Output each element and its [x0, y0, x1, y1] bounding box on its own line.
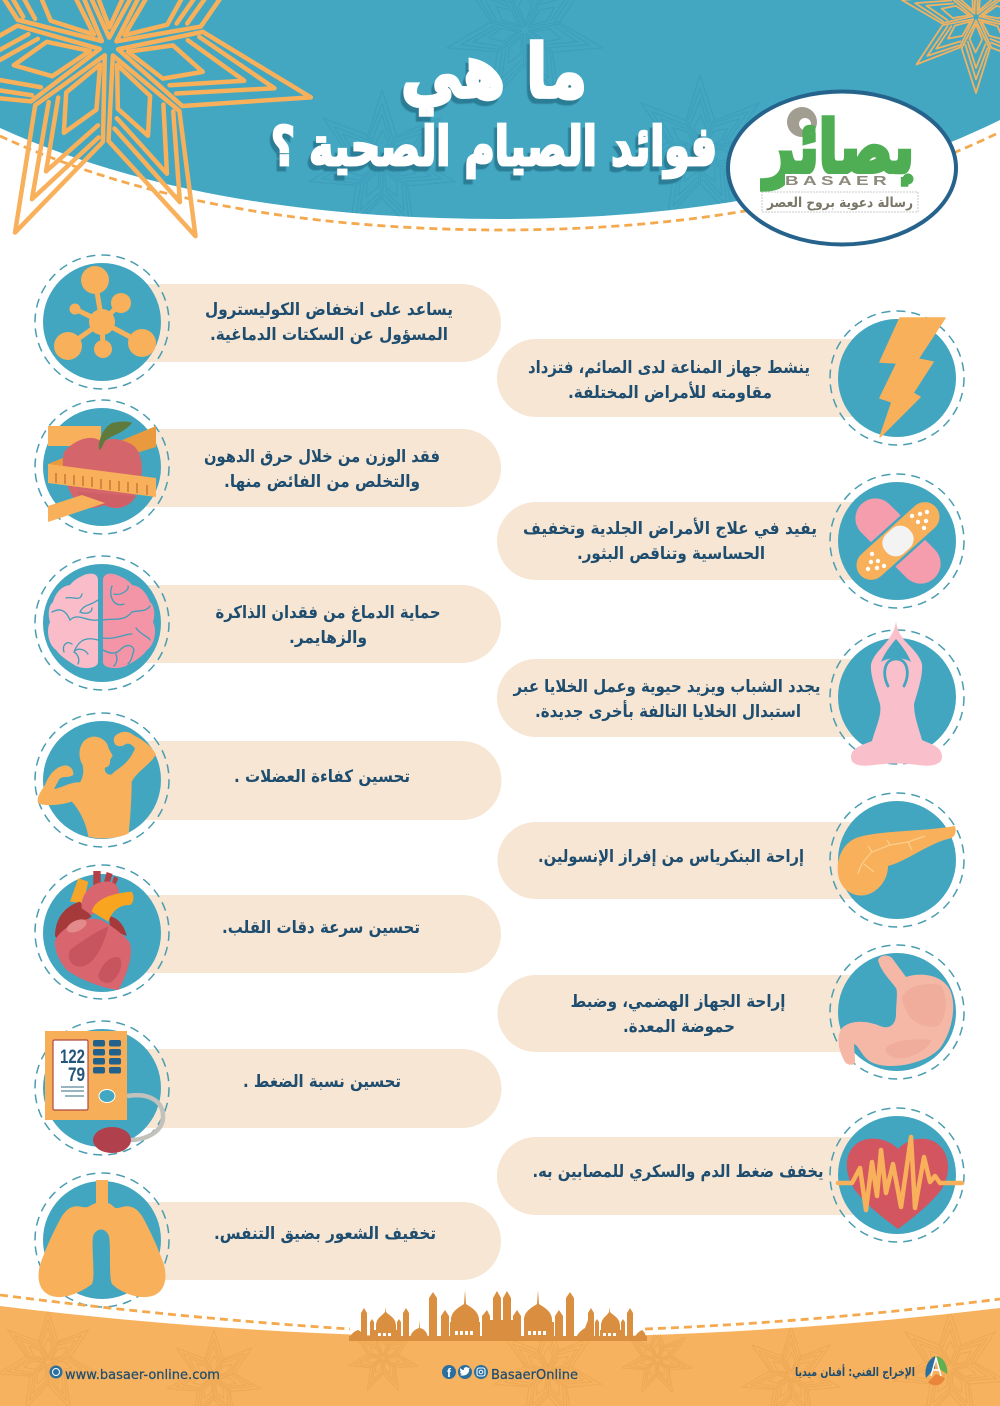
- decorative star: top left: [0, 0, 362, 302]
- icon: blood pressure monitor: 79: [68, 1065, 85, 1086]
- benefit 11: pancreas: إراحة البنكرياس من إفراز الإنسولين.: [538, 847, 804, 867]
- title: [271, 29, 717, 178]
- icon: lightning bolt: [880, 318, 945, 437]
- benefit 3: brain: والزهايمر.: [289, 628, 367, 648]
- benefit 9: skin: الحساسية وتناقص البثور.: [577, 544, 765, 564]
- benefit 6: blood pressure: [35, 1021, 502, 1155]
- benefit 1: cholesterol: [35, 255, 501, 389]
- header banner: [0, 0, 1000, 239]
- icon: lungs: [39, 1180, 165, 1297]
- logo badge: بصائر: [762, 105, 914, 190]
- benefit 2: weight loss: والتخلص من الفائض منها.: [224, 472, 420, 492]
- benefit 6: blood pressure: تحسين نسبة الضغط .: [243, 1072, 401, 1092]
- benefit 11: pancreas: [498, 793, 964, 927]
- benefit 13: blood sugar: يخفف ضغط الدم والسكري للمصابين به.: [532, 1162, 824, 1182]
- icon: heart with pulse line: [838, 1137, 962, 1229]
- benefit 12: digestive: حموضة المعدة.: [623, 1017, 735, 1037]
- benefit 8: immune system: [497, 311, 964, 445]
- social handle: BasaerOnline: [491, 1367, 578, 1383]
- benefit 9: skin: [497, 474, 964, 608]
- icon: molecule: [54, 266, 156, 360]
- benefit 3: brain: حماية الدماغ من فقدان الذاكرة: [216, 603, 440, 623]
- benefit 5: heart: [35, 865, 501, 999]
- benefit 8: immune system: ينشط جهاز المناعة لدى الصائم، فتزداد: [528, 358, 810, 378]
- title: ما هي: [401, 29, 587, 115]
- benefit 9: skin: يفيد في علاج الأمراض الجلدية وتخفيف: [523, 518, 817, 539]
- logo badge: [728, 92, 956, 244]
- benefit 3: brain: [35, 556, 501, 690]
- benefit 12: digestive: إراحة الجهاز الهضمي، وضبط: [570, 992, 786, 1012]
- website link: www.basaer-online.com: [65, 1367, 220, 1383]
- icon: flexing man: [38, 732, 156, 838]
- benefit 10: cell renewal: [497, 621, 964, 766]
- footer band: [0, 1295, 1000, 1406]
- decorative star: top right: [899, 0, 1000, 93]
- benefit 1: cholesterol: المسؤول عن السكتات الدماغية.: [210, 325, 448, 345]
- icon: anatomical heart: [55, 871, 133, 990]
- benefit 5: heart: تحسين سرعة دقات القلب.: [222, 918, 420, 938]
- logo badge: BASAER: [785, 173, 891, 188]
- benefit 12: digestive: [498, 945, 964, 1079]
- icon: pancreas: [838, 826, 956, 896]
- benefit 4: muscles: [35, 713, 502, 847]
- icon: blood pressure monitor: [45, 1031, 163, 1153]
- icon: apple with measuring tape: [48, 422, 156, 522]
- benefit 1: cholesterol: يساعد على انخفاض الكوليسترول: [205, 300, 453, 320]
- icon: blood pressure monitor: 122: [60, 1047, 85, 1068]
- social handle: [442, 1365, 578, 1383]
- benefit 2: weight loss: [35, 400, 501, 534]
- benefit 7: breathing: [35, 1173, 501, 1307]
- benefit 7: breathing: تخفيف الشعور بضيق التنفس.: [214, 1224, 436, 1244]
- icon: plaster: [847, 490, 949, 592]
- icon: stomach: [838, 956, 953, 1066]
- title: فوائد الصيام الصحية ؟: [271, 115, 717, 178]
- benefit 13: blood sugar: [497, 1108, 964, 1242]
- mosque skyline: [349, 1290, 647, 1341]
- credit: الإخراج الفني: أفنان ميديا: [795, 1364, 915, 1379]
- icon: producer logo: [925, 1356, 947, 1385]
- social handle: f: [447, 1366, 452, 1380]
- icon: meditating figure: [851, 621, 942, 766]
- benefit 8: immune system: مقاومته للأمراض المختلفة.: [568, 382, 772, 403]
- benefit 10: cell renewal: استبدال الخلايا التالفة بأخرى جديدة.: [535, 700, 801, 722]
- icon: brain: [48, 574, 155, 668]
- credit: [795, 1356, 947, 1385]
- benefit 10: cell renewal: يجدد الشباب ويزيد حيوية وعمل الخلايا عبر: [513, 677, 820, 697]
- benefit 4: muscles: تحسين كفاءة العضلات .: [234, 767, 410, 787]
- logo badge: رسالة دعوية بروح العصر: [766, 195, 913, 211]
- benefit 2: weight loss: فقد الوزن من خلال حرق الدهون: [204, 447, 440, 467]
